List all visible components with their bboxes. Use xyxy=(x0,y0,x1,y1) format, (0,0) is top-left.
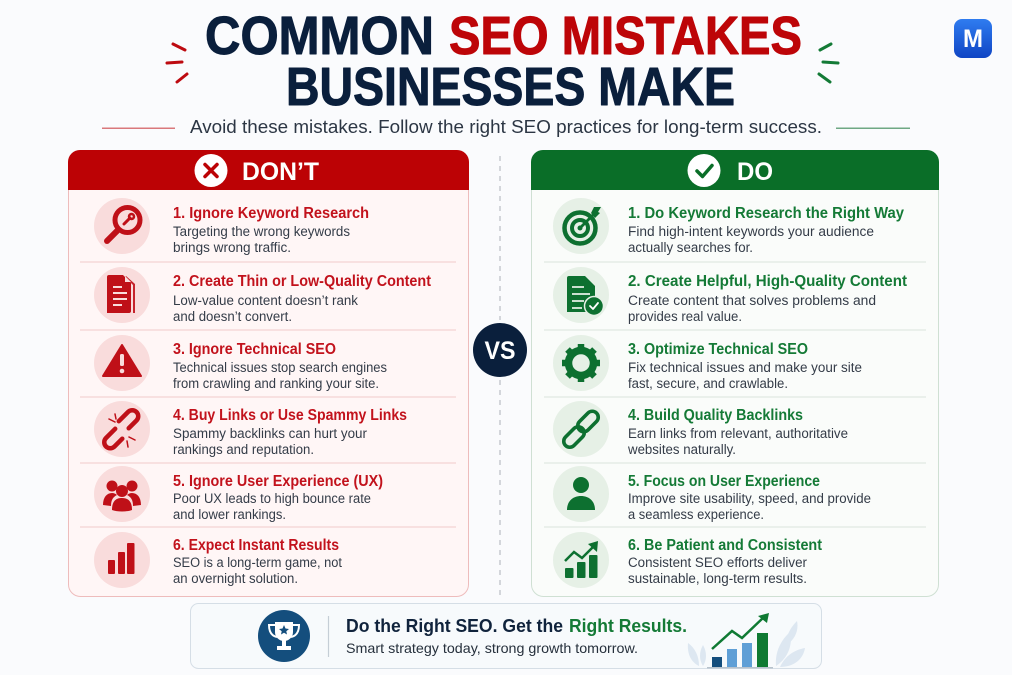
item: user experience: a seamless experience. xyxy=(628,507,764,522)
icon: red accent marks xyxy=(167,44,187,82)
item: ignore ux: and lower rankings. xyxy=(173,507,286,522)
item: ignore technical seo: Technical issues stop search engines xyxy=(173,360,387,375)
item: patient and consistent: 6. Be Patient and Consistent xyxy=(628,537,822,554)
title: SEO MISTAKES xyxy=(449,6,802,66)
item: ignore ux: Poor UX leads to high bounce rate xyxy=(173,491,371,506)
item: helpful content xyxy=(553,267,907,324)
panel: do xyxy=(531,150,939,596)
panel: don't xyxy=(68,150,469,596)
item: thin content xyxy=(94,267,431,324)
item: spammy links: 4. Buy Links or Use Spammy Links xyxy=(173,407,407,424)
item: instant results: an overnight solution. xyxy=(173,571,298,586)
item: ignore technical seo xyxy=(94,335,387,391)
item: spammy links: rankings and reputation. xyxy=(173,442,314,457)
vs badge xyxy=(473,323,527,377)
item: helpful content: 2. Create Helpful, High-Quality Content xyxy=(628,273,907,290)
item: patient and consistent: Consistent SEO efforts deliver xyxy=(628,555,807,570)
vs badge: VS xyxy=(484,337,516,365)
item: keyword research: 1. Do Keyword Research the Right Way xyxy=(628,205,904,222)
title xyxy=(205,6,802,117)
item: patient and consistent xyxy=(553,532,822,588)
item: instant results: SEO is a long-term game, not xyxy=(173,555,342,570)
item: quality backlinks xyxy=(553,401,848,457)
banner text: Right Results. xyxy=(569,616,687,636)
item: keyword research xyxy=(553,198,904,255)
item: user experience xyxy=(553,466,871,522)
item: quality backlinks: Earn links from relevant, authoritative xyxy=(628,426,848,441)
item: spammy links xyxy=(94,401,407,457)
icon: trophy xyxy=(258,610,310,662)
item: user experience: 5. Focus on User Experience xyxy=(628,473,820,490)
chart: growth bars xyxy=(707,613,773,668)
item: ignore keyword research: Targeting the wrong keywords xyxy=(173,224,350,239)
banner text: Do the Right SEO. Get the xyxy=(346,616,563,636)
panel header: don't xyxy=(68,150,469,190)
item: technical seo xyxy=(553,335,862,391)
item: patient and consistent: sustainable, long-term results. xyxy=(628,571,807,586)
item: ignore technical seo: from crawling and ranking your site. xyxy=(173,376,379,391)
item: instant results: 6. Expect Instant Results xyxy=(173,537,339,554)
item: technical seo: Fix technical issues and make your site xyxy=(628,360,862,375)
item: quality backlinks: websites naturally. xyxy=(627,442,736,457)
item: thin content: 2. Create Thin or Low-Quality Content xyxy=(173,273,431,290)
subtitle: Avoid these mistakes. Follow the right SEO practices for long-term success. xyxy=(190,116,822,137)
title: COMMON xyxy=(205,6,434,66)
item: spammy links: Spammy backlinks can hurt your xyxy=(173,426,368,441)
item: ignore keyword research: 1. Ignore Keyword Research xyxy=(173,205,369,222)
icon: green accent marks xyxy=(819,44,838,82)
item: technical seo: fast, secure, and crawlable. xyxy=(628,376,788,391)
item: instant results xyxy=(94,532,342,588)
panel header: do xyxy=(531,150,939,190)
item: thin content: and doesn’t convert. xyxy=(173,309,292,324)
item: ignore ux: 5. Ignore User Experience (UX) xyxy=(173,473,383,490)
banner text xyxy=(346,616,687,656)
center dashed divider xyxy=(499,156,501,597)
item: user experience: Improve site usability, speed, and provide xyxy=(628,491,871,506)
item: quality backlinks: 4. Build Quality Backlinks xyxy=(628,407,803,424)
bottom banner xyxy=(190,604,822,668)
banner text: Smart strategy today, strong growth tomorrow. xyxy=(346,640,638,656)
item: keyword research: actually searches for. xyxy=(628,240,753,255)
title: BUSINESSES MAKE xyxy=(286,57,735,117)
logo badge: M xyxy=(963,25,983,53)
panel header: do: DO xyxy=(737,158,773,186)
item: ignore technical seo: 3. Ignore Technical SEO xyxy=(173,341,336,358)
item: technical seo: 3. Optimize Technical SEO xyxy=(628,341,808,358)
item: ignore ux xyxy=(94,466,383,522)
logo badge xyxy=(954,19,992,58)
item: helpful content: Create content that solves problems and xyxy=(628,293,876,308)
item: helpful content: provides real value. xyxy=(628,309,742,324)
panel header: don't: DON’T xyxy=(242,158,319,186)
item: ignore keyword research: brings wrong traffic. xyxy=(173,240,291,255)
item: thin content: Low-value content doesn’t rank xyxy=(173,293,358,308)
item: keyword research: Find high-intent keywords your audience xyxy=(628,224,874,239)
item: ignore keyword research xyxy=(94,198,369,255)
icon: laurels xyxy=(688,621,805,667)
